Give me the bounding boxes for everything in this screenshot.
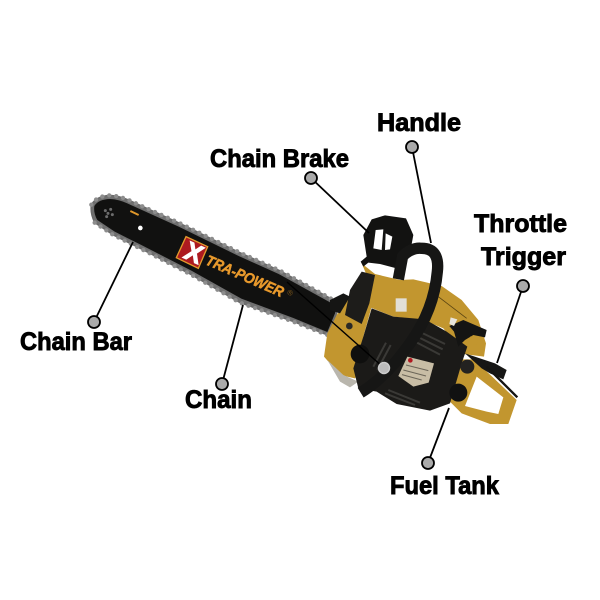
chainsaw guide bar with chain bbox=[91, 195, 338, 335]
leader line: throttle trigger bbox=[497, 280, 529, 363]
side knobs bbox=[351, 345, 369, 363]
label: Chain Bar: Chain Bar bbox=[20, 328, 132, 356]
leader line: chain brake bbox=[305, 172, 369, 233]
leader line: fuel tank bbox=[422, 408, 449, 469]
brand logo bbox=[176, 235, 295, 301]
front wrap handle bbox=[361, 248, 438, 393]
starter grip bbox=[449, 320, 487, 347]
label: Throttle Trigger: Throttle bbox=[474, 210, 567, 238]
chain brake guard bbox=[361, 215, 413, 268]
label: Chain: Chain bbox=[185, 386, 252, 414]
label: Throttle Trigger: Trigger bbox=[481, 243, 566, 271]
leader line: chain bar bbox=[88, 242, 133, 328]
chainsaw engine body bbox=[324, 215, 517, 424]
housing yellow bbox=[362, 263, 486, 357]
label: Fuel Tank: Fuel Tank bbox=[390, 472, 499, 500]
brand logo: X bbox=[180, 235, 209, 270]
leader line: body point bbox=[287, 282, 390, 374]
label: Throttle Trigger bbox=[474, 210, 567, 271]
dark engine housing bbox=[353, 308, 467, 411]
rear handle bbox=[448, 359, 517, 424]
sprocket cover yellow bbox=[324, 297, 372, 378]
label: Chain Brake: Chain Brake bbox=[210, 145, 349, 173]
sprocket cover dark bbox=[345, 272, 375, 324]
leader line: chain bbox=[216, 305, 243, 390]
label: Handle: Handle bbox=[377, 109, 461, 137]
brand logo: ® bbox=[286, 288, 295, 298]
brand logo: TRA-POWER bbox=[203, 253, 286, 301]
leader line: handle bbox=[406, 141, 431, 243]
vents bbox=[373, 330, 445, 405]
warning label bbox=[398, 357, 434, 387]
throttle trigger bbox=[465, 353, 507, 379]
